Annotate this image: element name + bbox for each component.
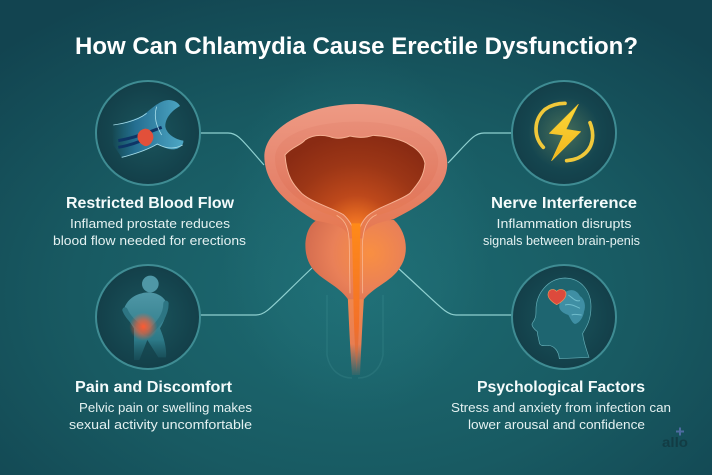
icon: person with pelvic pain — [96, 265, 200, 369]
text: nerve interference: Inflammation disrupts — [496, 217, 632, 231]
text: psychological factors — [451, 379, 671, 432]
bladder wall — [264, 104, 447, 238]
text: psychological factors: Psychological Factors — [477, 379, 645, 396]
text: restricted blood flow: Restricted Blood Flow — [66, 195, 235, 212]
icon: lightning bolt nerve — [512, 81, 616, 185]
text: pain and discomfort: Pelvic pain or swelling makes — [79, 401, 252, 415]
bladder and prostate illustration — [264, 104, 447, 375]
text: restricted blood flow: blood flow needed for erections — [53, 234, 246, 248]
text: nerve interference: signals between brain-penis — [483, 234, 640, 248]
urethra lower tube — [347, 287, 365, 375]
text: nerve interference — [483, 195, 640, 248]
connector: blood flow to bladder — [200, 133, 264, 165]
connector: pain to prostate — [200, 268, 312, 315]
title: How Can Chlamydia Cause Erectile Dysfunction? — [75, 33, 638, 60]
heart — [548, 289, 566, 305]
logo: allo: allo — [662, 435, 688, 450]
text: psychological factors: lower arousal and confidence — [468, 418, 645, 432]
icon: blocked blood vessel — [96, 81, 200, 185]
logo: allo — [662, 428, 688, 450]
urethra lining — [337, 215, 377, 293]
urethra core — [351, 223, 361, 373]
faint body silhouette — [221, 50, 491, 420]
text: restricted blood flow — [53, 195, 246, 248]
bladder inner rim — [275, 122, 438, 237]
icon: head with heart and brain — [512, 265, 616, 369]
text: pain and discomfort: Pain and Discomfort — [75, 379, 233, 396]
brain — [559, 290, 585, 324]
bladder lumen — [285, 135, 425, 238]
text: psychological factors: Stress and anxiety from infection can — [451, 401, 671, 415]
text: nerve interference: Nerve Interference — [491, 195, 637, 212]
text: pain and discomfort: sexual activity uncomfortable — [69, 418, 252, 432]
text: restricted blood flow: Inflamed prostate reduces — [70, 217, 230, 231]
connector: nerve to bladder — [448, 133, 512, 163]
text: pain and discomfort — [69, 379, 252, 432]
connector: psychological to prostate — [398, 268, 512, 315]
prostate — [305, 220, 406, 299]
